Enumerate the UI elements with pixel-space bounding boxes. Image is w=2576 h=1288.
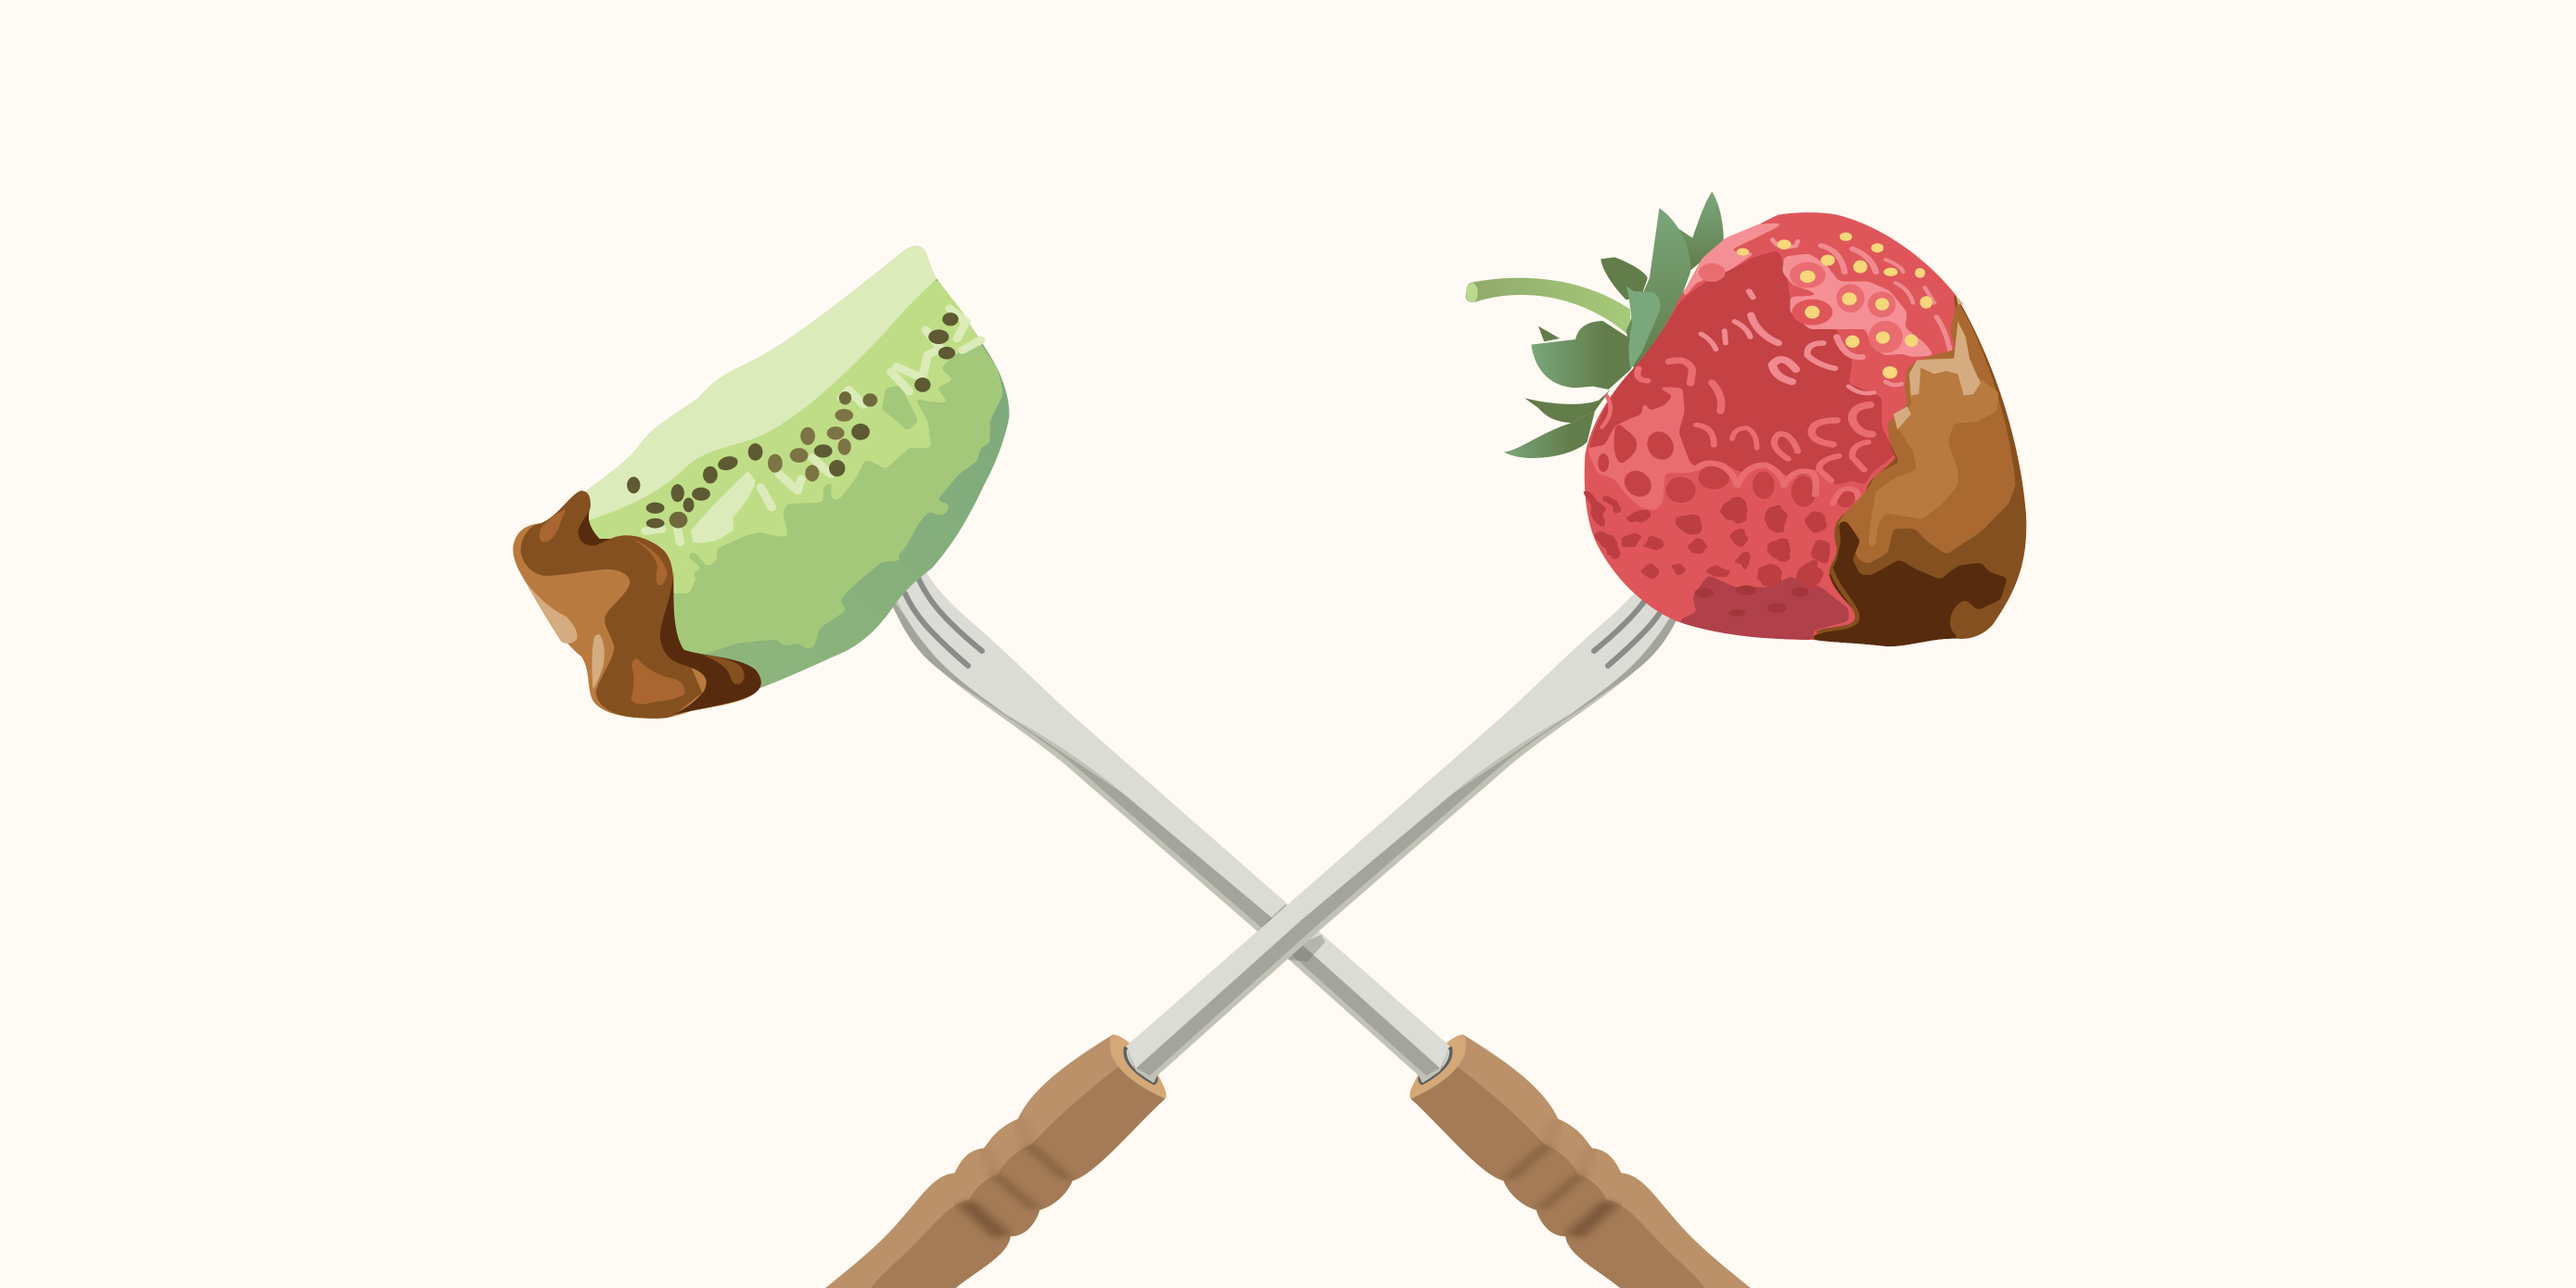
chocolate pale highlights — [1894, 295, 1981, 429]
kiwi chocolate coating — [513, 491, 761, 719]
kiwi skin — [587, 246, 1009, 688]
kiwi slice dipped in chocolate — [513, 246, 1009, 719]
chocolate light base — [513, 491, 761, 719]
cast shadow where the forks cross — [1256, 904, 1325, 962]
chocolate highlight patches — [540, 509, 684, 704]
kiwi pale blotches — [645, 309, 981, 543]
chocolate dark bottom layer — [1813, 521, 2008, 646]
strawberry pale seed cluster — [1782, 253, 1934, 357]
chocolate drip inside dark fold — [702, 655, 745, 684]
chocolate mid layer — [1837, 300, 2016, 564]
metal blade of back fork — [888, 556, 1449, 1083]
front fork: from strawberry to lower left handle — [825, 556, 1688, 1288]
chocolate base layer — [1813, 295, 2026, 646]
handle of front fork — [825, 1035, 1167, 1288]
strawberry dark dimples in shaded bottom — [1695, 585, 1809, 617]
strawberry bright pink marks — [1701, 246, 1950, 393]
kiwi mid green flesh — [593, 279, 1002, 655]
strawberry red body — [1585, 212, 2026, 640]
chocolate edge drip — [1817, 568, 1857, 633]
handle of back fork — [1409, 1035, 1751, 1288]
strawberry pink patch left — [1588, 387, 1701, 510]
chocolate light layer — [1868, 359, 1999, 549]
strawberry lower dimples — [1583, 490, 1830, 589]
strawberry leaves — [1504, 192, 1724, 458]
chocolate dark folds — [579, 507, 761, 715]
strawberry deep red centre — [1589, 250, 1895, 485]
strawberry dipped in chocolate — [1466, 192, 2026, 646]
kiwi seeds — [627, 312, 959, 529]
metal blade of front fork — [1127, 556, 1688, 1083]
strawberry shaded bottom — [1677, 575, 1849, 640]
kiwi light green band — [585, 279, 983, 593]
strawberry dimples in left patch — [1598, 425, 1855, 507]
chocolate pale highlights — [524, 580, 605, 690]
kiwi green patch within band — [882, 385, 919, 431]
kiwi pale top rim — [587, 246, 937, 520]
back fork: from kiwi to lower right handle — [888, 556, 1751, 1288]
strawberry yellow seeds — [1737, 233, 1932, 378]
chocolate medium layer — [521, 491, 702, 719]
illustration: crossed fondue forks with chocolate dipped fruit — [513, 191, 2027, 1288]
strawberry stem — [1466, 278, 1632, 338]
strawberry chocolate coating — [1813, 295, 2026, 646]
strawberry top pale band — [1683, 223, 1798, 300]
strawberry pink achene rings — [1602, 361, 1872, 504]
